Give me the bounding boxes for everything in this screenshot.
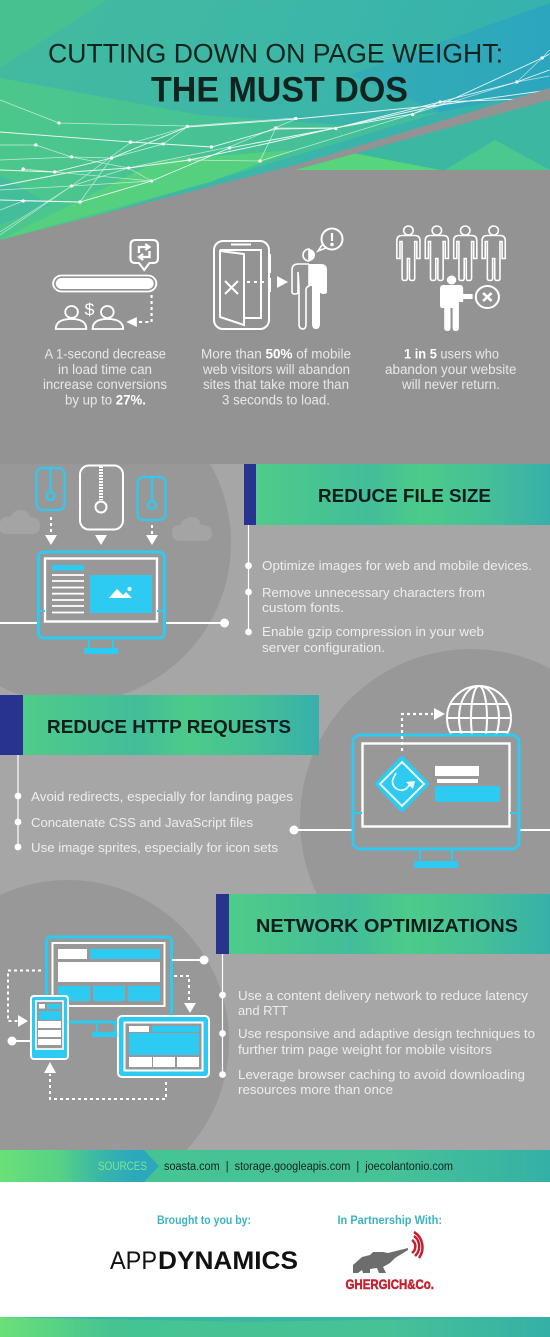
panel: sponsors background: [0, 1182, 550, 1317]
bullets: reduce file size: [245, 525, 532, 655]
arrows: sync between devices: [8, 956, 208, 1099]
bullets: network optimizations: further trim page weight for mobile visitors: [238, 1042, 493, 1057]
text: brought to you by: Brought to you by:: [157, 1213, 251, 1227]
text: stat two: sites that take more than: [203, 377, 349, 392]
bullets: network optimizations: Use responsive and adaptive design techniques to: [238, 1026, 535, 1041]
panel: lower background: [0, 464, 550, 1150]
bullets: reduce file size: Enable gzip compression in your web: [262, 624, 484, 639]
icon: monitor with page: [38, 552, 165, 654]
bullets: network optimizations: Leverage browser caching to avoid downloading: [238, 1067, 525, 1082]
icon: desktop monitor layout: [46, 937, 172, 1037]
text: stat two: 3 seconds to load.: [222, 392, 330, 407]
panel: footer band: [0, 1317, 550, 1337]
panel: network lines: [0, 50, 549, 235]
bullets: reduce http requests: [15, 755, 294, 855]
text: stat two: [201, 346, 351, 407]
bullets: network optimizations: resources more than once: [238, 1082, 393, 1097]
text: stat one: by up to 27%.: [65, 392, 146, 407]
panel: sources band: [0, 1150, 550, 1182]
title: CUTTING DOWN ON PAGE WEIGHT:: [48, 38, 503, 68]
logo: ghergich elephant: [346, 1232, 434, 1292]
bullets: reduce http requests: Use image sprites, especially for icon sets: [31, 840, 279, 855]
connector line: [0, 618, 229, 628]
panel: sources band: SOURCES: [98, 1161, 147, 1173]
heading: network optimizations: [216, 894, 550, 954]
text: stat two: More than 50% of mobile: [201, 346, 351, 362]
bullets: reduce file size: server configuration.: [262, 640, 385, 655]
text: in partnership with: In Partnership With:: [338, 1213, 442, 1227]
text: stat one: [43, 346, 167, 407]
bullets: reduce file size: Optimize images for web and mobile devices.: [262, 558, 532, 573]
icon: five users abandoning: [397, 226, 505, 331]
panel: hero background: [0, 0, 550, 245]
text: stat three: [385, 346, 516, 392]
heading: reduce http requests: [0, 695, 319, 755]
circle backgrounds: [0, 383, 550, 1202]
bullets: reduce http requests: Concatenate CSS and JavaScript files: [31, 815, 253, 830]
heading: reduce http requests: REDUCE HTTP REQUESTS: [47, 717, 291, 737]
panel: stats background: [0, 88, 550, 464]
panel: sources band: soasta.com | storage.googleapis.com | joecolantonio.com: [164, 1161, 453, 1173]
icon: load bar and conversions: [53, 240, 158, 329]
text: stat three: will never return.: [401, 377, 500, 392]
text: stat one: A 1-second decrease: [44, 346, 166, 362]
heading: reduce file size: [244, 464, 550, 525]
text: stat two: web visitors will abandon: [202, 362, 350, 377]
icon: phone door and user: [214, 228, 342, 329]
icon: tablet layout: [118, 1016, 209, 1077]
logo: appdynamics: DYNAMICS: [158, 1247, 298, 1275]
bullets: reduce file size: custom fonts.: [262, 600, 344, 615]
bullets: network optimizations: and RTT: [238, 1003, 288, 1018]
text: stat one: in load time can: [58, 362, 152, 377]
network nodes: [21, 56, 544, 204]
heading: reduce file size: REDUCE FILE SIZE: [318, 486, 491, 506]
logo: appdynamics: APP: [110, 1247, 157, 1275]
text: stat one: increase conversions: [43, 377, 167, 392]
connector: http: [290, 826, 550, 834]
bullets: network optimizations: Use a content delivery network to reduce latency: [238, 988, 529, 1003]
bullets: network optimizations: [219, 954, 535, 1097]
text: stat three: abandon your website: [385, 362, 516, 377]
logo: ghergich elephant: GHERGICH&Co.: [346, 1276, 434, 1292]
icon: phone layout: [31, 996, 68, 1059]
heading: network optimizations: NETWORK OPTIMIZATIONS: [256, 916, 518, 936]
icon: globe: [447, 686, 511, 750]
title: [48, 38, 503, 110]
bullets: reduce file size: Remove unnecessary characters from: [262, 585, 485, 600]
icon: load bar and conversions: $: [84, 299, 95, 319]
bullets: reduce http requests: Avoid redirects, especially for landing pages: [31, 789, 294, 804]
text: stat three: 1 in 5 users who: [404, 346, 499, 362]
title: THE MUST DOS: [151, 70, 408, 110]
icon: monitor with redirect: [352, 708, 519, 868]
icon: file compression zippers: [36, 466, 166, 545]
icon: clouds: [0, 510, 212, 541]
